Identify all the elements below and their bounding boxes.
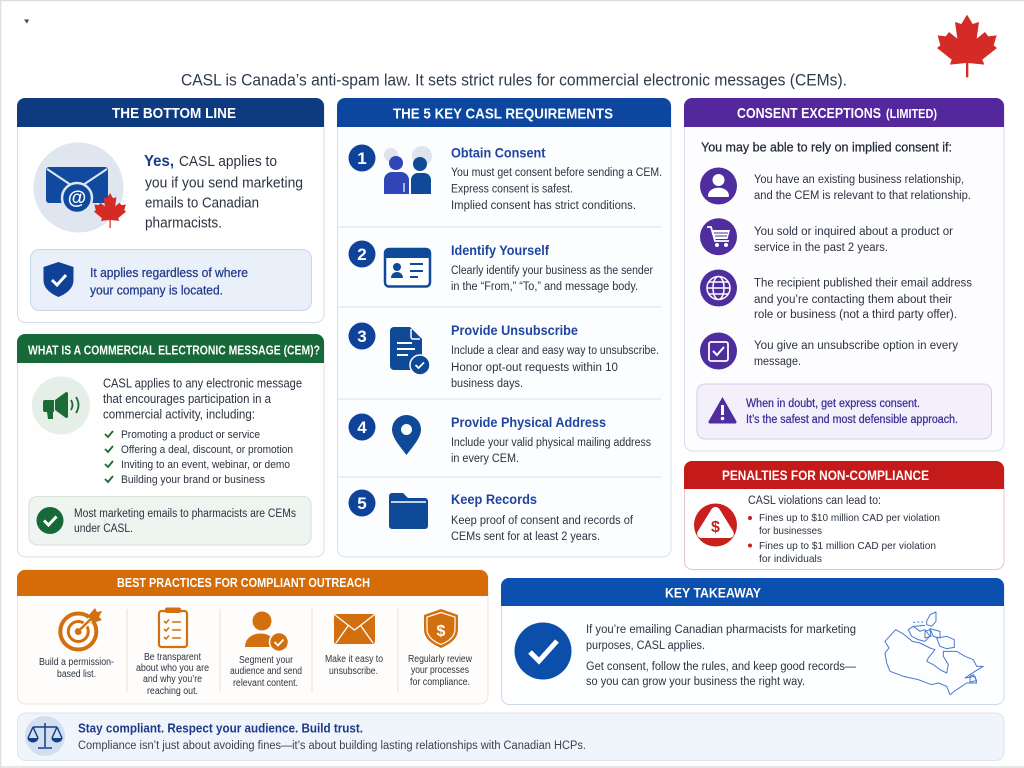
icon: document bbox=[390, 327, 430, 375]
requirement 3: provide unsubscribe: business days. bbox=[451, 378, 523, 390]
icon: email with maple leaf: @ bbox=[68, 188, 86, 209]
icon: person with check bbox=[245, 612, 288, 652]
text: violations list: for businesses bbox=[759, 525, 822, 537]
practice: easy unsubscribe: Make it easy to bbox=[325, 654, 383, 665]
text: yes statement: pharmacists. bbox=[145, 214, 222, 232]
exception: published address: and you’re contacting them about their bbox=[754, 294, 952, 306]
panel: consent exceptions bbox=[684, 98, 1004, 451]
requirement 2: identify yourself bbox=[348, 240, 653, 293]
text: takeaway: so you can grow your business the right way. bbox=[586, 676, 805, 688]
text: CEM definition: CASL applies to any electronic message bbox=[103, 377, 302, 391]
requirement 3: provide unsubscribe: Honor opt-out requests within 10 bbox=[451, 362, 618, 374]
requirement 1: obtain consent bbox=[348, 144, 662, 212]
icon: shield with dollar: $ bbox=[437, 623, 446, 640]
text: CEM definition: that encourages participation in a bbox=[103, 392, 271, 406]
practice: regular review: your processes bbox=[411, 665, 469, 676]
icon: maple leaf bbox=[937, 15, 997, 77]
requirement 1: obtain consent: Obtain Consent bbox=[451, 146, 546, 161]
callout: most marketing emails: under CASL. bbox=[74, 523, 133, 535]
checklist: Promoting a product or service bbox=[121, 429, 260, 441]
requirement 5: keep records: Keep proof of consent and records of bbox=[451, 515, 634, 527]
practice: be transparent: Be transparent bbox=[144, 652, 201, 663]
checklist bbox=[105, 429, 293, 486]
text: violations list bbox=[748, 495, 940, 565]
requirement 5: keep records: 5 bbox=[357, 494, 367, 513]
practice: be transparent: about who you are bbox=[136, 663, 209, 674]
practice: permission list: Build a permission- bbox=[39, 657, 114, 668]
requirement 4: provide physical address: 4 bbox=[357, 418, 367, 437]
heading: CONSENT EXCEPTIONS bbox=[737, 105, 881, 122]
text: takeaway: Get consent, follow the rules, and keep good records— bbox=[586, 661, 856, 673]
requirement 1: obtain consent: You must get consent before sending a CEM. bbox=[451, 167, 662, 179]
title: CASL is Canada’s anti-spam law. It sets strict rules for commercial electronic messages (CEMs). bbox=[181, 70, 847, 90]
callout: applies regardless: It applies regardless of where bbox=[90, 266, 248, 280]
requirement 5: keep records bbox=[348, 490, 634, 543]
practice: be transparent: and why you’re bbox=[143, 674, 202, 685]
exception: published address: role or business (not a third party offer). bbox=[754, 309, 957, 321]
panel: key takeaway bbox=[501, 578, 1004, 704]
heading: BEST PRACTICES FOR COMPLIANT OUTREACH bbox=[117, 575, 370, 590]
text: violations list: CASL violations can lead to: bbox=[748, 495, 881, 507]
exception: unsubscribe option bbox=[700, 332, 958, 370]
text: closing message: Stay compliant. Respect your audience. Build trust. bbox=[78, 721, 363, 736]
text: takeaway: purposes, CASL applies. bbox=[586, 640, 705, 652]
practice: segment audience: Segment your bbox=[239, 655, 294, 666]
icon: check circle bbox=[514, 622, 572, 680]
panel: the bottom line bbox=[17, 98, 324, 322]
exception: published address bbox=[700, 270, 972, 321]
callout: applies regardless: your company is located. bbox=[90, 284, 223, 298]
requirement 2: identify yourself: Clearly identify your business as the sender bbox=[451, 265, 653, 277]
icon: id card bbox=[385, 249, 430, 286]
icon: fine warning: $ bbox=[711, 519, 720, 536]
requirement 3: provide unsubscribe: 3 bbox=[357, 327, 367, 346]
icon: shield bbox=[44, 262, 74, 297]
practice: permission list: based list. bbox=[57, 669, 96, 680]
exception: existing relationship: You have an existing business relationship, bbox=[754, 174, 964, 186]
text: CEM definition: commercial activity, including: bbox=[103, 408, 255, 422]
panel: the 5 key CASL requirements bbox=[337, 98, 671, 557]
exception: sold or inquired bbox=[700, 218, 953, 255]
heading: (LIMITED) bbox=[886, 107, 937, 121]
callout: when in doubt bbox=[697, 384, 992, 439]
panel: best practices bbox=[17, 570, 488, 704]
icon: scales bbox=[25, 716, 65, 756]
requirement 3: provide unsubscribe bbox=[348, 322, 659, 390]
footer banner bbox=[18, 713, 1004, 760]
icon: location pin bbox=[392, 415, 421, 455]
text: yes statement: Yes, bbox=[144, 153, 174, 170]
practice: regular review: Regularly review bbox=[408, 654, 473, 665]
practice: be transparent bbox=[136, 608, 209, 697]
icon: envelope bbox=[334, 614, 375, 644]
text: takeaway bbox=[586, 624, 856, 688]
requirement 2: identify yourself: in the “From,” “To,” and message body. bbox=[451, 281, 638, 293]
requirement 4: provide physical address: Provide Physical Address bbox=[451, 415, 606, 430]
callout: most marketing emails bbox=[29, 496, 311, 545]
heading: KEY TAKEAWAY bbox=[665, 585, 762, 601]
requirement 2: identify yourself: Identify Yourself bbox=[451, 243, 549, 258]
callout: applies regardless bbox=[30, 250, 312, 310]
icon: warning triangle bbox=[708, 397, 737, 424]
requirement 4: provide physical address: in every CEM. bbox=[451, 453, 519, 465]
text: CEM definition bbox=[103, 377, 302, 422]
heading: WHAT IS A COMMERCIAL ELECTRONIC MESSAGE (CEM)? bbox=[28, 342, 320, 358]
heading: PENALTIES FOR NON-COMPLIANCE bbox=[722, 467, 929, 483]
practice: segment audience: relevant content. bbox=[233, 678, 298, 689]
exception: existing relationship bbox=[700, 168, 971, 204]
checklist: Inviting to an event, webinar, or demo bbox=[121, 459, 290, 471]
icon: folder bbox=[389, 493, 428, 529]
requirement 4: provide physical address: Include your valid physical mailing address bbox=[451, 437, 651, 449]
practice: easy unsubscribe: unsubscribe. bbox=[329, 666, 378, 677]
practice: segment audience: audience and send bbox=[230, 666, 302, 677]
requirement 1: obtain consent: 1 bbox=[357, 149, 367, 168]
practice: be transparent: reaching out. bbox=[147, 686, 198, 697]
heading: THE 5 KEY CASL REQUIREMENTS bbox=[393, 106, 613, 122]
exception: unsubscribe option: message. bbox=[754, 356, 801, 368]
exception: unsubscribe option: You give an unsubscribe option in every bbox=[754, 340, 958, 352]
checklist: Offering a deal, discount, or promotion bbox=[121, 444, 293, 456]
text: yes statement bbox=[144, 153, 303, 232]
panel: what is a CEM bbox=[17, 334, 324, 557]
text: violations list: Fines up to $1 million CAD per violation bbox=[759, 540, 936, 552]
icon: megaphone bbox=[32, 376, 90, 434]
panel: penalties for non-compliance bbox=[684, 461, 1004, 570]
icon: target bbox=[60, 608, 102, 650]
requirement 3: provide unsubscribe: Provide Unsubscribe bbox=[451, 323, 578, 338]
practice: segment audience bbox=[230, 612, 302, 689]
practice: permission list bbox=[39, 608, 114, 680]
icon: people bbox=[384, 146, 432, 194]
practice: regular review bbox=[408, 609, 473, 688]
text: takeaway: If you’re emailing Canadian pharmacists for marketing bbox=[586, 624, 856, 636]
text: closing message bbox=[78, 721, 586, 752]
text: violations list: for individuals bbox=[759, 553, 822, 565]
icon: fine warning bbox=[694, 504, 737, 546]
requirement 5: keep records: Keep Records bbox=[451, 492, 537, 507]
requirement 2: identify yourself: 2 bbox=[357, 245, 367, 264]
requirement 1: obtain consent: Express consent is safest. bbox=[451, 184, 573, 196]
heading: THE BOTTOM LINE bbox=[112, 105, 236, 122]
practice: easy unsubscribe bbox=[325, 614, 383, 677]
exception: published address: The recipient published their email address bbox=[754, 278, 972, 290]
practice: regular review: for compliance. bbox=[410, 677, 470, 688]
icon: map of Canada bbox=[885, 612, 983, 695]
callout: most marketing emails: Most marketing emails to pharmacists are CEMs bbox=[74, 508, 296, 520]
icon: clipboard bbox=[159, 608, 187, 647]
requirement 1: obtain consent: Implied consent has strict conditions. bbox=[451, 200, 636, 212]
exception: sold or inquired: You sold or inquired about a product or bbox=[754, 226, 953, 238]
icon: check circle bbox=[36, 507, 64, 534]
icon: email with maple leaf bbox=[34, 142, 126, 232]
callout: when in doubt: When in doubt, get express consent. bbox=[746, 398, 920, 410]
requirement 4: provide physical address bbox=[348, 414, 651, 465]
text: yes statement: emails to Canadian bbox=[145, 194, 259, 212]
exception: sold or inquired: service in the past 2 years. bbox=[754, 242, 888, 254]
callout: when in doubt: It’s the safest and most defensible approach. bbox=[746, 414, 958, 426]
text: closing message: Compliance isn’t just about avoiding fines—it’s about building lasting relationships with Canadian HCPs. bbox=[78, 740, 586, 752]
checklist: Building your brand or business bbox=[121, 474, 265, 486]
intro text: You may be able to rely on implied consent if: bbox=[701, 140, 952, 155]
text: yes statement: you if you send marketing bbox=[145, 174, 303, 192]
requirement 3: provide unsubscribe: Include a clear and easy way to unsubscribe. bbox=[451, 345, 659, 357]
text: yes statement: CASL applies to bbox=[179, 153, 277, 170]
text: violations list: Fines up to $10 million CAD per violation bbox=[759, 512, 940, 524]
exception: existing relationship: and the CEM is relevant to that relationship. bbox=[754, 190, 971, 202]
requirement 5: keep records: CEMs sent for at least 2 years. bbox=[451, 531, 600, 543]
